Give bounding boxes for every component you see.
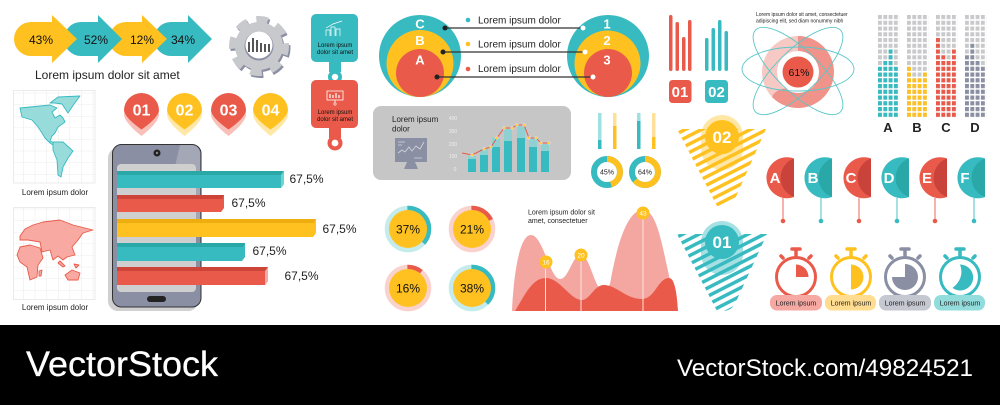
pin F (957, 157, 985, 223)
pill (770, 295, 822, 310)
pin C (843, 157, 871, 223)
funnel 01: 01 (713, 233, 731, 252)
pin 02: 02 (176, 102, 194, 120)
phone bar chart (108, 144, 357, 311)
phone (108, 144, 201, 311)
arrow values: 12% (130, 33, 154, 47)
tag: teal: Lorem ipsum (318, 43, 352, 49)
nested circles: right: 2 (603, 33, 611, 48)
pin A: A (770, 170, 781, 187)
pin E: E (922, 170, 932, 187)
waffle labels: B (912, 120, 922, 135)
atom diagram: 61% (788, 67, 810, 79)
nested circles: left: C (415, 16, 425, 32)
label: 67,5% (284, 269, 319, 283)
pin 04: 04 (262, 102, 280, 120)
pin C: C (846, 170, 857, 187)
pill: Lorem ipsum (885, 300, 925, 308)
stopwatch red (776, 249, 816, 296)
waffle labels: A (883, 120, 893, 135)
axis labels: 100 (449, 154, 457, 160)
nested circles: right (567, 15, 649, 97)
mountain chart text (528, 210, 595, 225)
tag: red (311, 80, 358, 150)
vertical progress bars (598, 113, 656, 149)
panel: line and bar chart (373, 106, 571, 180)
nested circles: right: 1 (603, 16, 611, 32)
ring 16%: 16% (396, 282, 420, 296)
arrow values: 43% (29, 33, 53, 47)
axis labels: 300 (449, 129, 457, 135)
axis labels: 200 (449, 142, 457, 148)
arrow values (29, 33, 195, 47)
atom text: adipiscing elit, sed diam nonummy nibh (756, 18, 843, 24)
map: Americas (14, 90, 95, 183)
map: Europe, Asia, Africa (14, 208, 95, 300)
ring 37%: 37% (396, 222, 420, 236)
badge 02: 02 (708, 84, 725, 101)
tag: teal: dolor sit amet (317, 50, 353, 56)
map caption: Lorem ipsum dolor (22, 188, 88, 197)
donut 64% (632, 159, 658, 185)
legend: Lorem ipsum dolor (478, 40, 561, 50)
mountain chart: 20 (577, 252, 585, 260)
pin B (804, 157, 832, 223)
brand logo text: VectorStock (26, 344, 218, 384)
map caption: Lorem ipsum dolor (22, 303, 88, 312)
pin B: B (808, 170, 819, 187)
bar 3 (117, 219, 316, 237)
pin 02 (167, 93, 202, 136)
mountain chart: 43 (639, 210, 647, 218)
pill: Lorem ipsum (776, 300, 816, 308)
axis labels: 0 (454, 167, 457, 173)
label: 67,5% (252, 244, 287, 258)
arrow 52% (64, 15, 122, 63)
atom text: Lorem ipsum dolor sit amet, consectetuer (756, 12, 848, 18)
ring 21% (451, 208, 493, 250)
mountain chart text: amet, consectetuer (528, 218, 588, 225)
waffle chart C (936, 15, 957, 118)
pin 01: 01 (133, 102, 150, 120)
waffle chart B (907, 15, 928, 118)
pill (879, 295, 931, 310)
footer band (0, 325, 1000, 405)
mountain chart text: Lorem ipsum dolor sit (528, 210, 595, 216)
rounded bars 02 (705, 20, 728, 71)
axis labels: 400 (449, 116, 457, 122)
arrow values: 52% (84, 33, 108, 47)
ring 37% (387, 208, 429, 250)
ring 38%: 38% (460, 282, 484, 296)
pin D: D (884, 170, 895, 187)
stopwatch yellow (832, 249, 870, 296)
bar 1 (117, 171, 284, 188)
arrow 12% (109, 15, 167, 63)
waffle labels: D (970, 120, 980, 135)
atom diagram (741, 15, 855, 127)
icon: monitor (395, 138, 427, 169)
donut 64%: 64% (638, 170, 652, 176)
arrow values: 34% (171, 33, 195, 47)
atom text (756, 12, 848, 24)
pin 04 (253, 93, 288, 136)
nested circles: left: B (415, 33, 425, 48)
legend: Lorem ipsum dolor (478, 16, 561, 26)
mountain chart (512, 206, 678, 311)
waffle labels (883, 120, 980, 135)
panel heading: Lorem ipsum (392, 115, 439, 124)
pin E (919, 157, 947, 223)
nested circles: right: 3 (603, 52, 611, 68)
funnel 02 (677, 115, 766, 206)
axis labels (449, 116, 457, 173)
pin A (766, 157, 794, 223)
arrow 43% (14, 15, 77, 63)
badge 02 (705, 80, 728, 103)
bar 2 (117, 195, 224, 212)
nested circles: left: A (415, 52, 425, 68)
image id text: VectorStock.com/49824521 (677, 355, 973, 382)
pill (934, 295, 985, 310)
ring 38% (451, 267, 493, 309)
panel heading (392, 115, 439, 134)
pin 03: 03 (220, 102, 238, 120)
label: 67,5% (232, 196, 266, 210)
waffle labels: C (941, 120, 951, 135)
ring 16% (387, 267, 429, 309)
label: 67,5% (322, 222, 357, 236)
badge 01: 01 (672, 84, 688, 101)
nested circles: left (379, 15, 461, 97)
panel heading: dolor (392, 124, 410, 134)
funnel 01 (677, 221, 767, 311)
pill: Lorem ipsum (831, 300, 871, 308)
waffle chart A (878, 15, 899, 118)
ring 21%: 21% (460, 222, 484, 236)
connector lines (434, 26, 596, 80)
stopwatch slate (886, 249, 924, 296)
bars (468, 126, 549, 172)
line (462, 124, 550, 156)
donut 45%: 45% (600, 170, 614, 176)
legend: Lorem ipsum dolor (478, 64, 561, 75)
rounded bars 01 (669, 15, 692, 71)
stopwatch teal (940, 249, 980, 296)
arrow chain (14, 15, 212, 63)
pin D (881, 157, 909, 223)
arrow 34% (154, 15, 212, 63)
tag: teal (311, 14, 358, 84)
badge 01 (669, 80, 692, 103)
pin F: F (960, 170, 970, 187)
pill (825, 295, 876, 310)
arrow caption: Lorem ipsum dolor sit amet (35, 68, 180, 82)
donut 45% (594, 159, 620, 185)
label: 67,5% (290, 172, 324, 186)
bar 5 (117, 267, 268, 285)
waffle chart D (965, 15, 986, 118)
pin 01 (124, 93, 159, 136)
legend (466, 16, 561, 75)
bar 4 (117, 243, 245, 261)
tag: red: dolor sit amet (317, 117, 353, 123)
pin 03 (211, 93, 246, 136)
icon: gear (230, 17, 290, 77)
funnel 02: 02 (713, 128, 731, 147)
tag: red: Lorem ipsum (318, 110, 352, 116)
mountain chart: 16 (542, 260, 550, 266)
pill: Lorem ipsum (940, 300, 980, 308)
